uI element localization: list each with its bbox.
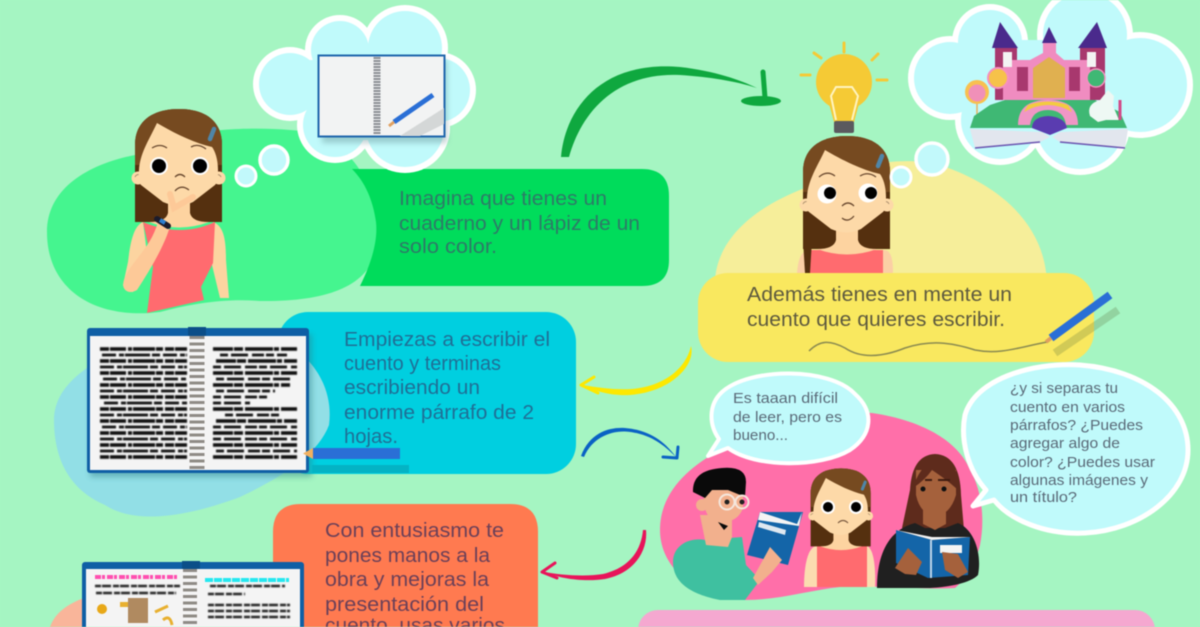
text: improved presentation: obra y mejoras la xyxy=(325,568,490,591)
panel: story in mind xyxy=(698,0,1193,362)
icon: castle book xyxy=(965,22,1128,148)
icon: flat pencil xyxy=(303,448,409,473)
text: improved presentation: pones manos a la xyxy=(325,544,491,567)
text: improved presentation xyxy=(325,519,505,627)
text box: blue xyxy=(278,312,576,474)
blob: green xyxy=(47,129,378,313)
text: first draft: hojas. xyxy=(344,425,398,448)
blob: peach xyxy=(50,596,320,627)
speech bubble: small: Es taaan difícil xyxy=(733,391,838,407)
notebook: dense text xyxy=(87,327,312,477)
cloud: notebook thought xyxy=(253,5,476,173)
girl: worried xyxy=(804,468,875,587)
girl: idea xyxy=(797,136,894,273)
text: story in mind: cuento que quieres escribir. xyxy=(747,309,1005,331)
text: first draft xyxy=(344,328,550,448)
arrow: yellow xyxy=(581,346,692,395)
text: improved presentation: Con entusiasmo te xyxy=(325,519,504,542)
speech bubble: large xyxy=(964,365,1188,533)
speech bubble: small xyxy=(708,373,868,463)
thought bubbles: small xyxy=(891,143,948,187)
text box: orange xyxy=(273,504,538,627)
icon: pencil with squiggle xyxy=(809,295,1118,356)
text: improved presentation: presentación del xyxy=(325,593,484,616)
text: first draft: cuento y terminas xyxy=(344,352,501,375)
text box: green xyxy=(352,169,669,286)
panel: friends feedback xyxy=(660,365,1188,600)
person: woman with book xyxy=(877,454,979,588)
text: imagine: cuaderno y un lápiz de un xyxy=(399,212,640,235)
text: story in mind xyxy=(747,284,1012,331)
speech bubble: small: bueno... xyxy=(733,428,788,444)
girl: thinking xyxy=(123,109,229,313)
text: imagine: solo color. xyxy=(399,235,497,258)
speech bubble: small: de leer, pero es xyxy=(733,410,842,426)
speech bubble: large: algunas imágenes y xyxy=(1010,473,1149,489)
cloud: castle thought xyxy=(908,0,1193,175)
speech bubble: large: un título? xyxy=(1010,490,1077,506)
panel: pink bottom xyxy=(638,610,1155,627)
text: imagine: Imagina que tienes un xyxy=(399,187,607,210)
blob: light blue xyxy=(54,345,330,517)
speech bubble: large: ¿y si separas tu xyxy=(1010,381,1118,397)
text: first draft: Empiezas a escribir el xyxy=(344,328,550,351)
speech bubble: large: color? ¿Puedes usar xyxy=(1010,455,1155,471)
text: imagine xyxy=(399,187,640,258)
arrow: green xyxy=(561,66,781,157)
blob: pink xyxy=(660,413,982,600)
text: first draft: enorme párrafo de 2 xyxy=(344,401,534,424)
person: man with book xyxy=(673,468,803,600)
text box: yellow xyxy=(698,273,1094,362)
notebook: illustrated xyxy=(82,561,304,627)
arrow: red xyxy=(542,530,646,580)
panel: first draft xyxy=(54,312,576,517)
speech bubble: large: agregar algo de xyxy=(1010,436,1120,452)
panel: imagine notebook xyxy=(47,5,669,313)
arrow: blue xyxy=(581,428,678,458)
speech bubble: large: cuento en varios xyxy=(1010,400,1125,416)
text: first draft: escribiendo un xyxy=(344,376,480,399)
icon: open notebook with pencil xyxy=(318,56,447,143)
blob: pale yellow xyxy=(715,161,1047,285)
panel: improved presentation xyxy=(50,504,538,627)
icon: light bulb xyxy=(801,43,887,133)
speech bubble: large: párrafos? ¿Puedes xyxy=(1010,418,1143,434)
thought bubbles: small xyxy=(236,146,288,186)
text: story in mind: Además tienes en mente un xyxy=(747,284,1012,306)
